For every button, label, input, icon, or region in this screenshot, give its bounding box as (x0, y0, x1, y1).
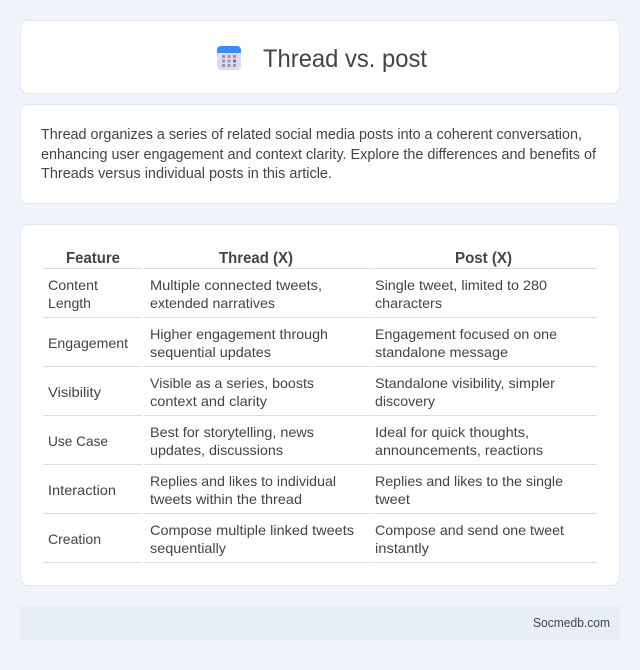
table header: Thread (X) (219, 250, 293, 267)
footer (20, 606, 620, 640)
row: content length: Content (48, 277, 98, 293)
table header: Feature (66, 250, 120, 267)
row: content length: characters (375, 295, 442, 311)
row: engagement: Higher engagement through (150, 326, 328, 342)
row: interaction: Replies and likes to the single (375, 473, 563, 489)
row: content length: Single tweet, limited to 280 (375, 277, 547, 293)
row: creation: Creation (48, 531, 101, 547)
title: Thread vs. post (263, 45, 427, 73)
intro text: enhancing user engagement and context clarity. Explore the differences and benefits of (41, 147, 597, 163)
panel: comparison table (20, 224, 620, 586)
intro text: Threads versus individual posts in this article. (41, 166, 332, 182)
row: visibility: Standalone visibility, simpler (375, 375, 555, 391)
row: visibility: Visibility (48, 384, 101, 400)
row: interaction: Replies and likes to individual (150, 473, 336, 489)
row: visibility: Visible as a series, boosts (150, 375, 314, 391)
row: visibility: discovery (375, 393, 435, 409)
row: engagement: Engagement (48, 335, 128, 351)
row: engagement: sequential updates (150, 344, 271, 360)
row: creation: Compose and send one tweet (375, 522, 564, 538)
row: creation: instantly (375, 540, 429, 556)
row: creation: sequentially (150, 540, 226, 556)
footer: Socmedb.com (533, 616, 610, 630)
row: interaction (43, 473, 597, 514)
row: engagement (43, 326, 597, 367)
row: interaction: Interaction (48, 482, 116, 498)
table header: Post (X) (455, 250, 512, 267)
row: creation (43, 522, 597, 563)
row: engagement: standalone message (375, 344, 508, 360)
row: use case: Ideal for quick thoughts, (375, 424, 529, 440)
row: use case (43, 424, 597, 465)
intro text: Thread organizes a series of related social media posts into a coherent conversation, (41, 127, 582, 143)
row: content length: extended narratives (150, 295, 275, 311)
row: content length: Multiple connected tweets, (150, 277, 322, 293)
table header (43, 250, 597, 269)
row: engagement: Engagement focused on one (375, 326, 557, 342)
intro text (41, 127, 597, 182)
row: interaction: tweet (375, 491, 410, 507)
row: use case: announcements, reactions (375, 442, 543, 458)
row: use case: Use Case (48, 433, 108, 449)
panel: title card (20, 20, 620, 94)
row: visibility: context and clarity (150, 393, 267, 409)
row: visibility (43, 375, 597, 416)
panel: introduction (20, 104, 620, 204)
row: content length (43, 277, 597, 318)
icon: calendar (217, 46, 241, 70)
row: use case: updates, discussions (150, 442, 283, 458)
row: interaction: tweets within the thread (150, 491, 302, 507)
row: use case: Best for storytelling, news (150, 424, 314, 440)
row: content length: Length (48, 295, 91, 311)
row: creation: Compose multiple linked tweets (150, 522, 354, 538)
